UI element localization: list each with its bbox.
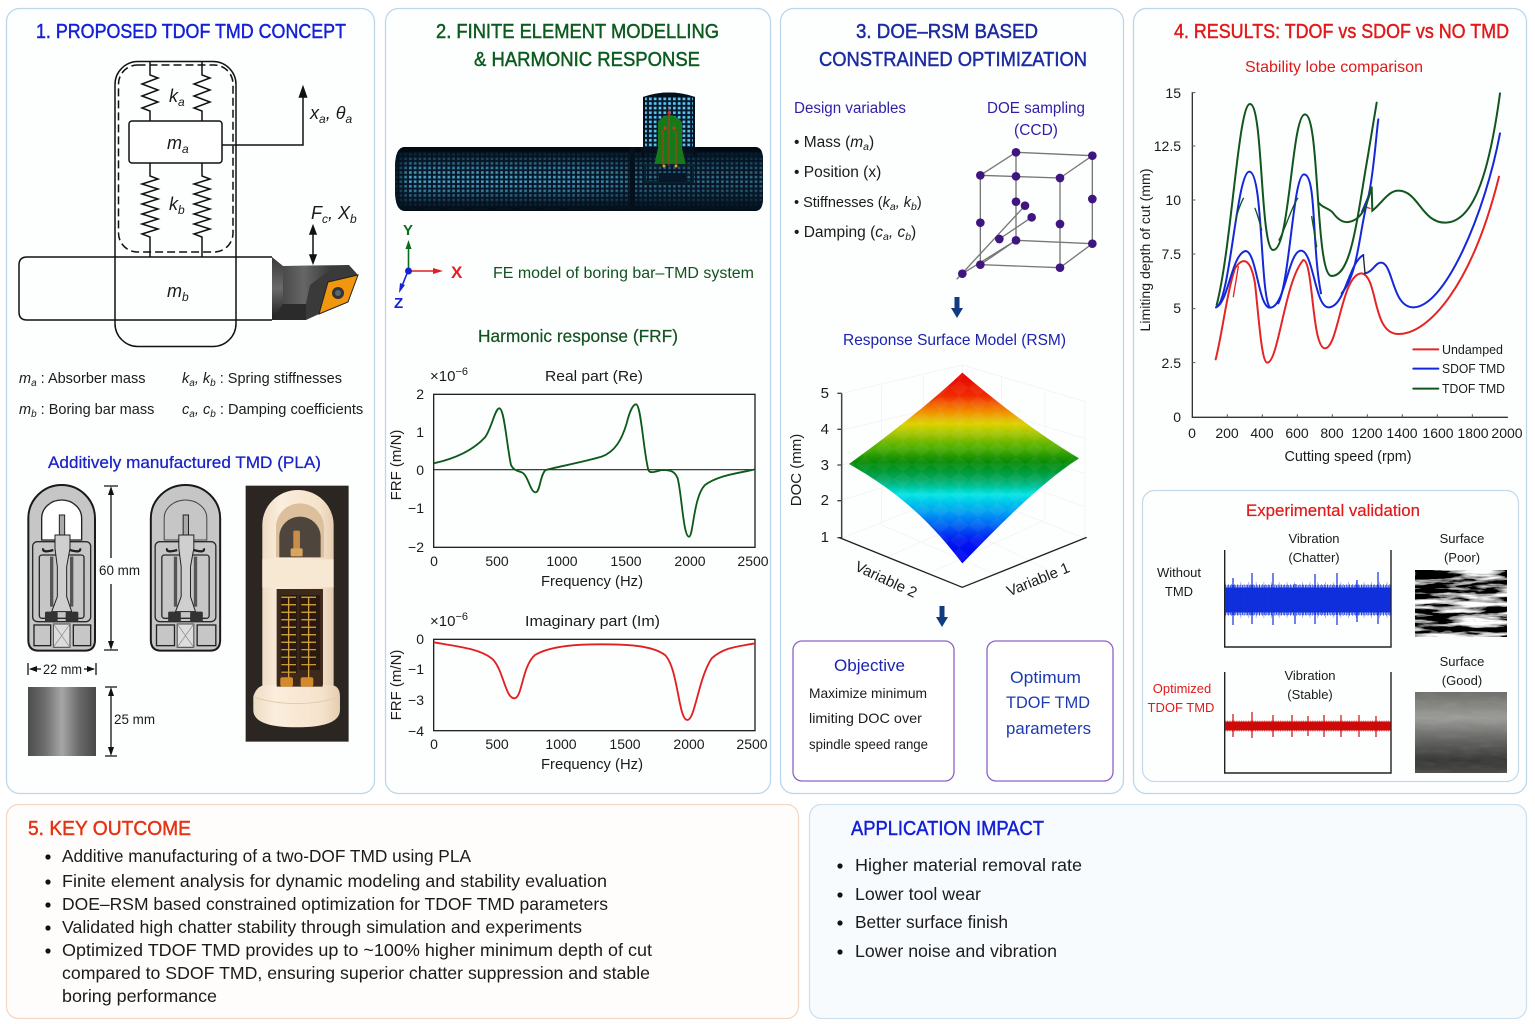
chart: stability lobes: 800 <box>1320 425 1344 441</box>
chart: imaginary part FRF: Frequency (Hz) <box>541 756 643 773</box>
photo: printed PLA TMD <box>246 486 349 742</box>
bullet list: key outcomes: compared to SDOF TMD, ensuring superior chatter suppression and stable <box>62 963 650 983</box>
chart: stability lobes: 5 <box>1173 300 1181 316</box>
caption: FE model: FE model of boring bar–TMD system <box>493 265 754 282</box>
chart: imaginary part FRF: 2500 <box>736 736 768 752</box>
list: design variables: , k <box>896 195 912 211</box>
legend of symbols: a <box>31 378 37 389</box>
panel: 5 key outcome <box>6 804 798 1018</box>
heading: panel 3: 3. DOE–RSM BASED <box>856 21 1038 43</box>
chart: imaginary part FRF: −4 <box>408 723 424 739</box>
chart: stability lobes: Undamped <box>1442 342 1503 357</box>
chart: imaginary part FRF: 2000 <box>673 736 705 752</box>
bullet list: key outcomes: Additive manufacturing of a two-DOF TMD using PLA <box>62 846 471 866</box>
chart: 3D response surface: 5 <box>821 385 829 402</box>
box: objective: Objective <box>834 656 905 675</box>
chart: stability lobes: 15 <box>1165 85 1181 101</box>
chart: imaginary part FRF: −6 <box>455 611 468 623</box>
list: design variables: a <box>883 231 889 243</box>
chart: real part FRF: FRF (m/N) <box>388 430 405 500</box>
schematic labels: k <box>169 86 178 106</box>
dimension: 25 mm: 25 mm <box>114 712 155 727</box>
list: design variables: • Position (x) <box>794 164 881 181</box>
chart: 3D response surface: 4 <box>821 421 829 438</box>
heading: panel 2: & HARMONIC RESPONSE <box>474 49 700 71</box>
legend of symbols: c <box>182 402 190 418</box>
legend of symbols: : Boring bar mass <box>37 402 154 418</box>
legend of symbols: b <box>31 409 37 420</box>
chart: imaginary part FRF: FRF (m/N) <box>388 650 405 720</box>
chart: real part FRF: 2500 <box>737 553 769 569</box>
chart: real part FRF: 2 <box>416 386 424 402</box>
chart: stability lobes: 600 <box>1285 425 1309 441</box>
chart: imaginary part FRF: −3 <box>408 692 424 708</box>
list: design variables: ) <box>917 195 922 211</box>
image: good surface <box>1415 654 1507 773</box>
box: optimum parameters: TDOF TMD <box>1006 693 1090 712</box>
heading: panel 3 <box>819 21 1087 71</box>
heading: panel 2: 2. FINITE ELEMENT MODELLING <box>436 21 719 43</box>
chart: stability lobes: 2.5 <box>1162 355 1181 371</box>
list: design variables: Design variables <box>794 100 906 117</box>
bullet list: application impacts: Lower tool wear <box>855 884 981 904</box>
box: optimum parameters: Optimum <box>1010 668 1081 687</box>
legend of symbols: m <box>19 402 31 418</box>
box: optimum parameters <box>987 641 1113 781</box>
signal: stable vibration: (Stable) <box>1287 687 1333 702</box>
chart: 3D response surface: DOC (mm) <box>788 434 805 506</box>
row label: without TMD: Without <box>1157 565 1201 580</box>
chart: real part FRF: 1500 <box>610 553 642 569</box>
bullet list: key outcomes: Optimized TDOF TMD provides up to ~100% higher minimum depth of cut <box>62 940 652 960</box>
signal: chatter vibration <box>1225 531 1391 647</box>
legend of symbols: : Absorber mass <box>37 371 145 387</box>
row label: without TMD: TMD <box>1165 584 1193 599</box>
chart: real part FRF <box>388 366 769 590</box>
row label: optimized TDOF TMD <box>1148 681 1214 715</box>
image: good surface: Surface <box>1440 654 1484 669</box>
list: design variables: • Stiffnesses (k <box>794 195 890 211</box>
heading: application impact: APPLICATION IMPACT <box>851 818 1044 840</box>
TMD section drawing left <box>28 485 95 651</box>
chart: stability lobes: 200 <box>1215 425 1239 441</box>
schematic labels: , θ <box>326 103 346 123</box>
chart: imaginary part FRF: 0 <box>430 736 438 752</box>
legend of symbols: b <box>210 409 216 420</box>
chart: stability lobes: SDOF TMD <box>1442 361 1505 376</box>
schematic labels: a <box>319 112 326 126</box>
icon: boring tool with insert <box>272 257 358 320</box>
dimension: 60 mm <box>99 486 140 650</box>
box: objective: limiting DOC over <box>809 710 922 726</box>
chart: real part FRF: ×10 <box>430 368 455 385</box>
list: design variables <box>794 100 922 243</box>
bullet list: key outcomes: Validated high chatter stability through simulation and experiments <box>62 917 582 937</box>
chart: stability lobes: Cutting speed (rpm) <box>1284 449 1412 465</box>
panel: 2 finite element modelling <box>386 8 770 794</box>
panel: application impact <box>810 804 1526 1018</box>
schematic labels: a <box>178 95 185 109</box>
bullet list: application impacts: Higher material removal rate <box>855 855 1082 875</box>
icon: XYZ coordinate axes: Y <box>403 222 413 239</box>
legend of symbols: a <box>189 378 195 389</box>
diagram: CCD sampling cube <box>957 148 1097 279</box>
schematic labels: F <box>311 203 322 223</box>
signal: chatter vibration: Vibration <box>1288 531 1340 546</box>
bullet list: key outcomes: boring performance <box>62 986 217 1006</box>
chart: real part FRF: 0 <box>416 462 424 478</box>
chart: real part FRF: 500 <box>485 553 509 569</box>
chart: stability lobes: 0 <box>1188 425 1196 441</box>
subheading: harmonic response: Harmonic response (FRF) <box>478 326 678 346</box>
arrow: to objective <box>936 606 948 627</box>
chart: real part FRF: 1000 <box>546 553 578 569</box>
list: design variables: b <box>911 201 917 213</box>
box: objective: spindle speed range <box>809 736 928 752</box>
legend of symbols: : Spring stiffnesses <box>216 371 342 387</box>
chart: real part FRF: 1 <box>416 424 424 440</box>
legend of symbols <box>19 371 363 420</box>
list: design variables: • Mass (m <box>794 134 863 151</box>
label: DOE sampling: DOE sampling <box>987 100 1085 117</box>
schematic labels: c <box>322 212 328 226</box>
list: design variables: a <box>890 201 896 213</box>
chart: real part FRF: Frequency (Hz) <box>541 573 643 590</box>
chart: 3D response surface: 2 <box>821 492 829 509</box>
signal: stable vibration: Vibration <box>1284 668 1336 683</box>
image: printed block sample <box>28 687 96 756</box>
schematic labels: b <box>350 212 357 226</box>
icon: XYZ coordinate axes <box>394 222 463 312</box>
schematic labels: m <box>167 281 182 301</box>
dimension: 60 mm: 60 mm <box>99 563 140 578</box>
schematic labels: , X <box>328 203 351 223</box>
chart: 3D response surface: 3 <box>821 457 829 474</box>
heading: panel 3: CONSTRAINED OPTIMIZATION <box>819 49 1087 71</box>
schematic labels: k <box>169 194 178 214</box>
heading: panel 1: 1. PROPOSED TDOF TMD CONCEPT <box>36 21 346 43</box>
legend of symbols: b <box>210 378 216 389</box>
arrow: to RSM <box>951 297 963 318</box>
image: good surface: (Good) <box>1442 673 1482 688</box>
heading: key outcome: 5. KEY OUTCOME <box>28 818 191 840</box>
icon: XYZ coordinate axes: Z <box>394 295 403 312</box>
bullet list: application impacts <box>837 855 1082 961</box>
heading: panel 2 <box>436 21 719 71</box>
heading: experimental validation: Experimental validation <box>1246 501 1420 520</box>
schematic labels: a <box>345 112 352 126</box>
legend of symbols: , c <box>195 402 211 418</box>
chart: real part FRF: −1 <box>408 500 424 516</box>
chart: stability lobes: 1600 <box>1422 425 1454 441</box>
chart: imaginary part FRF <box>388 611 768 773</box>
chart: imaginary part FRF: ×10 <box>430 613 455 630</box>
list: design variables: ) <box>869 134 874 151</box>
chart: 3D response surface: 1 <box>821 529 829 546</box>
chart: stability lobes: 10 <box>1165 192 1181 208</box>
list: design variables: ) <box>911 224 916 241</box>
legend of symbols: m <box>19 371 31 387</box>
chart: stability lobes: Limiting depth of cut (mm) <box>1138 168 1153 332</box>
legend of symbols: : Damping coefficients <box>216 402 363 418</box>
chart: real part FRF: −2 <box>408 539 424 555</box>
dimension: 25 mm <box>105 687 155 756</box>
row label: without TMD <box>1157 565 1201 599</box>
subheading: stability lobe comparison: Stability lobe comparison <box>1245 59 1423 76</box>
chart: stability lobes: 1400 <box>1386 425 1418 441</box>
chart: real part FRF: 0 <box>430 553 438 569</box>
chart: real part FRF: Real part (Re) <box>545 368 643 385</box>
panel: 4 results <box>1134 8 1526 794</box>
chart: stability lobes: 1800 <box>1457 425 1489 441</box>
label: DOE sampling: (CCD) <box>1014 122 1058 139</box>
legend of symbols: k <box>182 371 190 387</box>
legend of symbols: , k <box>195 371 211 387</box>
chart: imaginary part FRF: −1 <box>408 661 424 677</box>
schematic labels: m <box>167 133 182 153</box>
chart: imaginary part FRF: 1000 <box>545 736 577 752</box>
schematic labels: x <box>310 103 319 123</box>
list: design variables: • Damping (c <box>794 224 883 241</box>
signal: chatter vibration: (Chatter) <box>1288 550 1340 565</box>
bullet list: application impacts: Better surface finish <box>855 912 1008 932</box>
chart: stability lobes <box>1138 85 1523 465</box>
bullet list: key outcomes: Finite element analysis for dynamic modeling and stability evaluation <box>62 871 607 891</box>
subheading: additively manufactured TMD: Additively manufactured TMD (PLA) <box>48 453 321 472</box>
panel: 1 proposed TDOF TMD concept <box>6 8 374 794</box>
icon: XYZ coordinate axes: X <box>451 263 463 282</box>
label: DOE sampling <box>987 100 1085 139</box>
list: design variables: a <box>863 141 869 153</box>
schematic labels <box>167 86 357 304</box>
box: optimum parameters: parameters <box>1006 719 1091 738</box>
signal: stable vibration <box>1225 668 1391 773</box>
list: design variables: , c <box>889 224 905 241</box>
chart: real part FRF: −6 <box>455 366 468 378</box>
dimension: 22 mm <box>28 662 96 677</box>
schematic labels: b <box>182 290 189 304</box>
panel: 3 DOE-RSM optimization <box>780 8 1124 794</box>
chart: imaginary part FRF: Imaginary part (Im) <box>525 613 660 630</box>
list: design variables: b <box>905 231 911 243</box>
row label: optimized TDOF TMD: Optimized <box>1153 681 1211 696</box>
schematic labels: a <box>182 142 189 156</box>
chart: 3D response surface <box>788 365 1087 602</box>
chart: 3D response surface: Variable 2 <box>852 558 920 602</box>
bullet list: key outcomes: DOE–RSM based constrained optimization for TDOF TMD parameters <box>62 894 608 914</box>
box: objective: Maximize minimum <box>809 685 927 701</box>
FE mesh model of boring bar with TMD <box>390 88 770 214</box>
chart: imaginary part FRF: 1500 <box>609 736 641 752</box>
chart: imaginary part FRF: 500 <box>485 736 509 752</box>
image: poor surface: (Poor) <box>1444 550 1480 565</box>
panel: experimental validation <box>1142 490 1518 782</box>
chart: stability lobes: 7.5 <box>1162 246 1181 262</box>
chart: stability lobes: 1200 <box>1351 425 1383 441</box>
schematic: two-DOF TMD on boring bar <box>19 61 316 346</box>
box: objective <box>793 641 954 781</box>
TMD section drawing right <box>151 485 220 651</box>
chart: imaginary part FRF: 0 <box>416 631 424 647</box>
chart: stability lobes: 0 <box>1173 409 1181 425</box>
bullet list: application impacts: Lower noise and vibration <box>855 941 1057 961</box>
bullet list: key outcomes <box>45 846 652 1006</box>
heading: response surface model: Response Surface Model (RSM) <box>843 332 1066 349</box>
dimension: 22 mm: 22 mm <box>43 662 82 677</box>
chart: stability lobes: TDOF TMD <box>1442 381 1505 396</box>
chart: real part FRF: 2000 <box>674 553 706 569</box>
chart: stability lobes: 2000 <box>1491 425 1523 441</box>
row label: optimized TDOF TMD: TDOF TMD <box>1148 700 1214 715</box>
schematic labels: b <box>178 203 185 217</box>
image: poor surface <box>1415 531 1507 637</box>
chart: stability lobes: 400 <box>1250 425 1274 441</box>
image: poor surface: Surface <box>1440 531 1484 546</box>
chart: stability lobes: 12.5 <box>1154 138 1181 154</box>
chart: 3D response surface: Variable 1 <box>1004 560 1072 600</box>
legend of symbols: a <box>189 409 195 420</box>
